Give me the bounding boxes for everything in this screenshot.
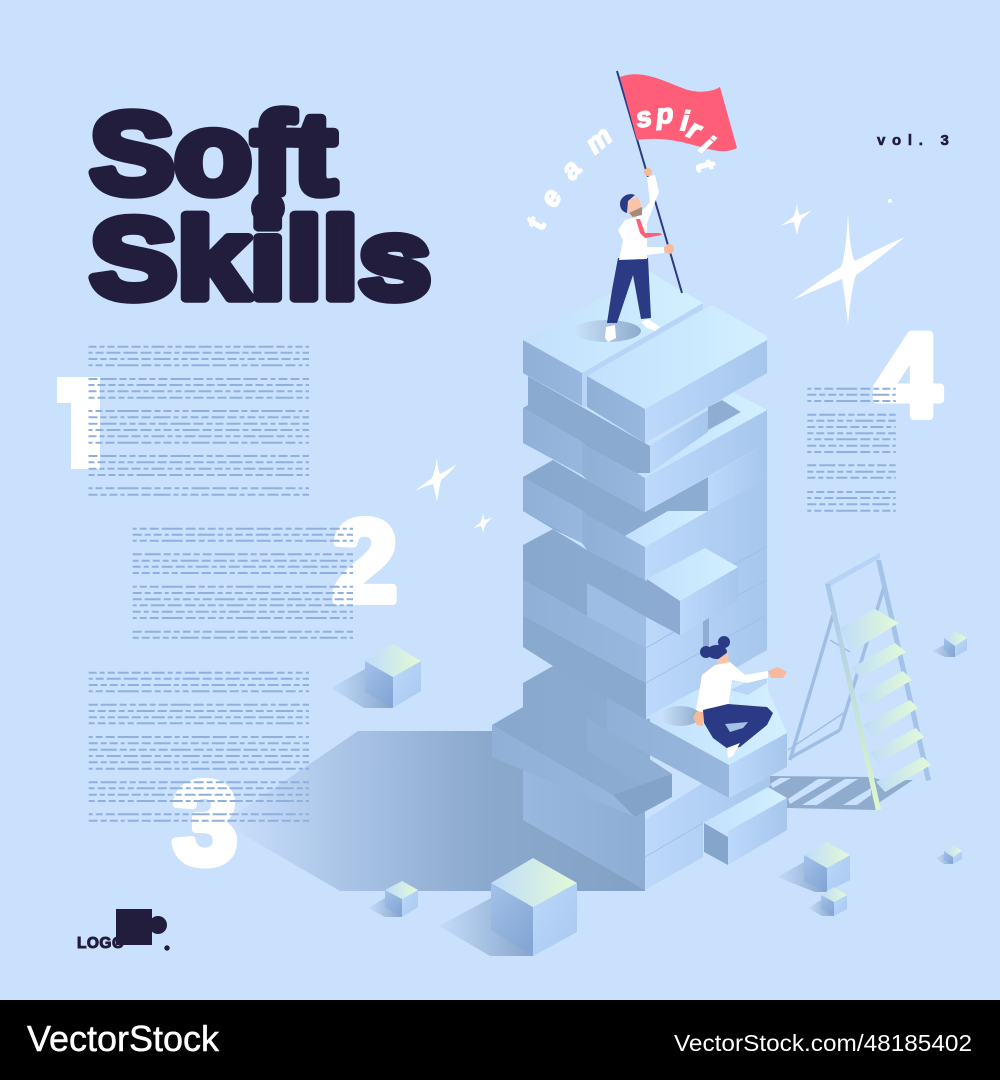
title: Soft Skills bbox=[90, 91, 431, 323]
curved label: team spirit: team spirit bbox=[520, 98, 722, 234]
man with flag bbox=[573, 71, 737, 342]
watermark url: VectorStock.com/48185402 bbox=[674, 1030, 972, 1056]
ladder back legs bbox=[788, 587, 884, 760]
bottom layer right face bbox=[645, 740, 770, 890]
right column bbox=[645, 508, 767, 720]
dark middle block bbox=[492, 666, 650, 795]
woman's plank bbox=[646, 680, 787, 765]
lower left plank bbox=[492, 725, 635, 817]
legs bbox=[607, 258, 651, 323]
cube E bbox=[808, 887, 847, 916]
trousers bbox=[703, 704, 773, 749]
volume label: vol. 3 bbox=[877, 132, 956, 149]
text block 2 bbox=[133, 529, 353, 638]
ladder shadow bbox=[760, 776, 913, 810]
flag pole bbox=[617, 71, 682, 293]
text block 1 bbox=[88, 347, 309, 495]
pulled block bbox=[647, 579, 680, 635]
foreground block bbox=[704, 787, 787, 865]
foot bbox=[727, 743, 740, 758]
cube C bbox=[439, 858, 577, 956]
numeral 1: 1 bbox=[43, 355, 113, 494]
watermark brand: VectorStock bbox=[27, 1018, 220, 1059]
watermark band bbox=[0, 1000, 1000, 1080]
layer four bbox=[523, 460, 708, 580]
text block 3 bbox=[89, 673, 309, 821]
shirt bbox=[696, 662, 768, 712]
layer two bbox=[523, 376, 650, 478]
cube G bbox=[936, 845, 962, 864]
shoes bbox=[605, 319, 660, 342]
text block 4 bbox=[807, 389, 896, 511]
logo bbox=[77, 909, 170, 952]
numeral 2: 2 bbox=[333, 496, 397, 626]
seated woman bbox=[660, 636, 787, 758]
cube F bbox=[932, 631, 967, 657]
ladder top bar bbox=[825, 553, 880, 588]
numeral 4: 4 bbox=[875, 310, 941, 442]
layer three bbox=[523, 408, 582, 475]
head bbox=[627, 197, 642, 217]
numeral 3: 3 bbox=[173, 758, 237, 888]
plank top, layer five bbox=[625, 511, 708, 547]
numeral 1 bbox=[57, 377, 100, 469]
bottom layer left face bbox=[523, 760, 645, 890]
tower bbox=[492, 272, 787, 890]
step ladder bbox=[788, 553, 931, 811]
cube D bbox=[777, 842, 850, 892]
hands bbox=[693, 667, 787, 726]
hands bbox=[644, 168, 674, 254]
big tower shadow bbox=[223, 731, 645, 891]
top right plank bbox=[587, 376, 645, 443]
ladder steps bbox=[840, 609, 931, 792]
tie bbox=[636, 219, 662, 238]
cube A bbox=[331, 644, 421, 708]
standing shadow bbox=[573, 320, 641, 342]
flag bbox=[620, 74, 737, 151]
logo: LOGO bbox=[77, 935, 124, 952]
title: Soft Skills: Skills bbox=[90, 196, 431, 323]
beard bbox=[629, 207, 642, 217]
knee gap bbox=[725, 722, 748, 732]
sparkles bbox=[415, 199, 905, 533]
seated shadow bbox=[660, 706, 700, 726]
ladder right rail bbox=[876, 560, 931, 781]
top left plank bbox=[523, 340, 582, 406]
hair bbox=[620, 194, 635, 213]
hair buns bbox=[700, 636, 730, 659]
face bbox=[717, 652, 729, 670]
title: Soft Skills: Soft bbox=[90, 91, 336, 218]
shirt bbox=[618, 175, 664, 260]
lower left stack bbox=[523, 615, 646, 720]
ladder front rail bbox=[825, 584, 881, 811]
cube B bbox=[368, 881, 418, 917]
middle plank top bbox=[587, 717, 672, 787]
